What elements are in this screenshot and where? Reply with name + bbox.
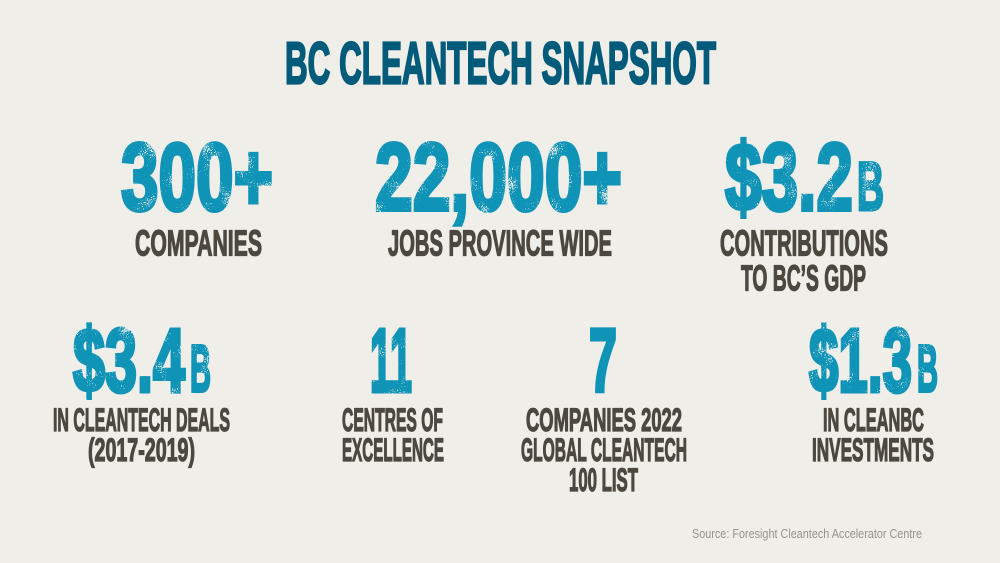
stat: 7 companies xyxy=(521,312,687,498)
label: in CleanBC investments xyxy=(812,402,934,468)
number: $1.3: $1.3 xyxy=(809,312,912,412)
stat: $3.4B deals: B xyxy=(190,332,211,406)
label: contributions to BC's GDP: TO BC’S GDP xyxy=(741,258,866,298)
number: $3.4: $3.4 xyxy=(73,312,185,412)
label: companies: COMPANIES xyxy=(135,222,262,264)
infographic canvas: IN CLEANTECH DEALS xyxy=(53,402,230,438)
label: in cleantech deals: (2017-2019) xyxy=(88,432,195,468)
label: in cleantech deals xyxy=(53,402,230,468)
source note: Source: Foresight Cleantech Accelerator Centre xyxy=(692,526,922,541)
label: contributions to BC's GDP xyxy=(720,222,888,298)
infographic canvas: GLOBAL CLEANTECH xyxy=(521,432,687,468)
label: companies global cleantech 100 xyxy=(521,402,687,498)
stat: 300+ companies xyxy=(121,124,273,264)
stat: $3.2B GDP xyxy=(720,124,888,298)
unit: B: B xyxy=(857,148,884,225)
label: companies global cleantech 100: COMPANIES 2022 xyxy=(526,402,682,438)
infographic canvas: B xyxy=(917,332,938,406)
infographic canvas: CENTRES OF xyxy=(342,402,443,438)
number: 7: 7 xyxy=(589,312,617,412)
infographic canvas: EXCELLENCE xyxy=(342,432,444,468)
number: 22,000+: 22,000+ xyxy=(375,124,622,231)
number: 300+: 300+ xyxy=(121,124,273,231)
label: centres of excellence xyxy=(342,402,444,468)
label: companies global cleantech 100: 100 LIST xyxy=(569,462,638,498)
stat: 11 centres: 11 xyxy=(370,312,412,412)
stat: 22,000+ jobs xyxy=(375,124,622,264)
stat: $3.4B deals xyxy=(53,312,230,468)
number: $3.2: $3.2 xyxy=(725,124,853,231)
label: jobs province wide: JOBS PROVINCE WIDE xyxy=(388,222,612,264)
stat: $1.3B investments xyxy=(809,312,938,468)
stat: 11 centres xyxy=(342,312,444,468)
